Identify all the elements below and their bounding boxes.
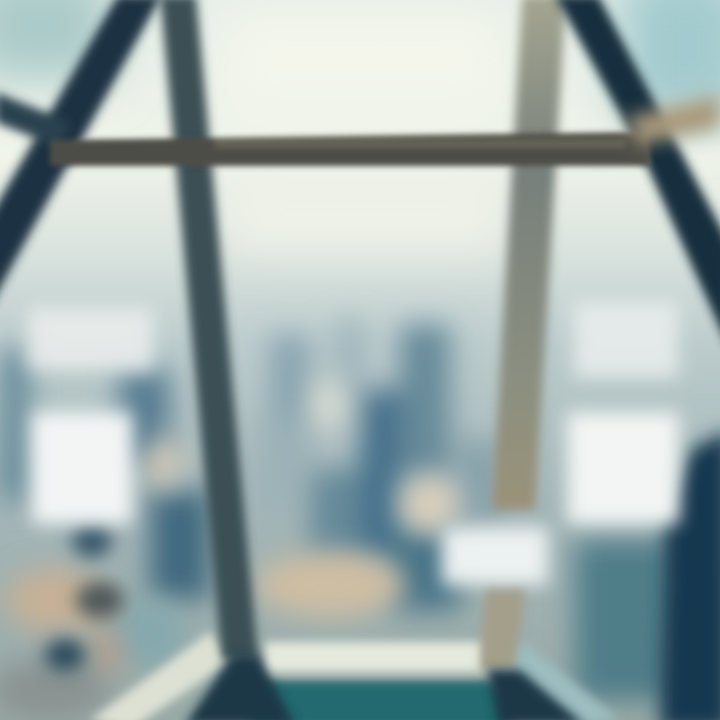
dark spots in lower left	[45, 522, 124, 671]
building: dark tower right	[660, 430, 720, 720]
beam: tan bracket right	[625, 95, 720, 145]
beam: left vertical	[160, 0, 258, 660]
white window reflections	[28, 302, 679, 585]
floor: dark base	[185, 655, 585, 720]
beam: right vertical lower	[480, 590, 525, 670]
beam: horizontal crossbar	[50, 132, 650, 166]
sky corner tints	[0, 0, 720, 250]
beam: upper-right diagonal	[555, 0, 720, 350]
beam: left short strut	[0, 92, 70, 148]
ground: sandy city blocks	[0, 379, 458, 720]
beam: upper-left diagonal	[0, 0, 162, 315]
floor ledge and teal glass	[90, 632, 620, 720]
city skyline	[0, 320, 675, 700]
beam: right vertical	[492, 0, 566, 510]
